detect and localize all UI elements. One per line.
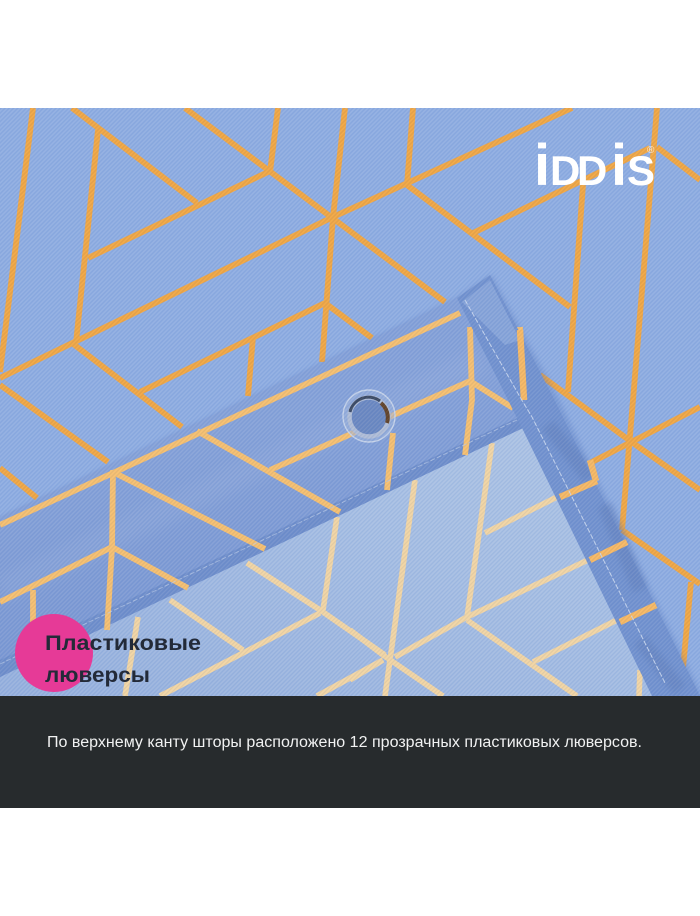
- top hem band with grommets: [0, 298, 524, 677]
- heading text: Пластиковые: [45, 631, 201, 655]
- gold geometric pattern on fabric: [0, 108, 700, 696]
- logo wordmark: D: [577, 147, 607, 194]
- caption text: По верхнему канту шторы расположено 12 прозрачных пластиковых люверсов.: [47, 734, 642, 751]
- callout: heading with pink circle: [15, 614, 201, 692]
- dark caption panel: [0, 696, 700, 808]
- icon: grommet: [343, 390, 395, 442]
- band shine: [0, 360, 480, 590]
- fabric background: [0, 108, 700, 696]
- pink circle: [15, 614, 93, 692]
- grommet metal ring: [350, 398, 388, 436]
- logo wordmark: i: [611, 133, 627, 198]
- band fabric: [0, 298, 523, 677]
- grommet outer clear ring: [343, 390, 395, 442]
- logo registered mark: ®: [647, 145, 655, 156]
- sheer lower curtain area: [0, 428, 652, 696]
- infographic canvas: [0, 108, 700, 808]
- side hem pattern stripes: [520, 330, 656, 622]
- logo wordmark: S: [627, 147, 655, 194]
- band seam stitching: [0, 420, 517, 664]
- sheer fabric: [0, 428, 652, 696]
- band pattern lines: [0, 313, 524, 630]
- side hem stitching: [465, 300, 665, 683]
- fabric twill texture: [0, 108, 700, 696]
- heading text: люверсы: [45, 663, 150, 687]
- logo wordmark: i: [534, 133, 550, 198]
- band lower seam strip: [0, 418, 523, 677]
- side hem: [457, 275, 700, 696]
- logo wordmark: D: [550, 147, 580, 194]
- side hem dark folds: [548, 425, 680, 690]
- curtain photo: [0, 108, 700, 700]
- side hem fabric: [457, 275, 700, 696]
- hem shadow: [0, 280, 700, 700]
- grommet inner shadow: [350, 397, 380, 412]
- brand logo: [534, 133, 655, 198]
- grommet brown reflection: [381, 403, 388, 423]
- sheer pattern lines: [125, 443, 640, 696]
- panel background: [0, 696, 700, 808]
- side hem highlight: [462, 280, 520, 345]
